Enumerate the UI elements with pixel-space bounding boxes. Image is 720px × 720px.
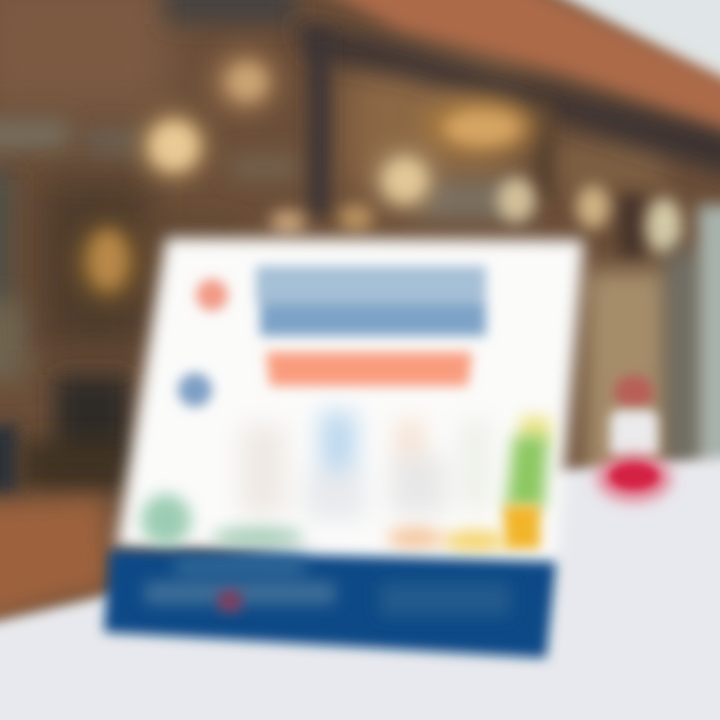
pillars (308, 30, 646, 260)
base text placeholder, left (145, 558, 335, 604)
wooden floor (0, 498, 110, 630)
green mound left (141, 494, 191, 546)
right window (585, 205, 720, 480)
icon: red badge (196, 279, 228, 311)
base text placeholder, right (380, 582, 510, 616)
dark band under roof (290, 20, 720, 178)
roof (270, 0, 720, 132)
sign panel (104, 238, 584, 658)
colored strip above base (212, 527, 507, 551)
sky (490, 0, 720, 98)
bar: green and yellow stack (504, 416, 550, 549)
red and white cone (598, 375, 670, 500)
icon: red mark on base (218, 590, 242, 612)
blue base band (104, 550, 556, 658)
heading: blue title band (256, 266, 486, 336)
sign white board (116, 238, 584, 560)
heading: orange subtitle band (266, 352, 472, 386)
icon: blue badge (178, 373, 212, 407)
columns of pale content (240, 412, 490, 520)
warm light halos (78, 50, 538, 300)
warm lights (90, 63, 682, 288)
table surface (0, 456, 720, 720)
